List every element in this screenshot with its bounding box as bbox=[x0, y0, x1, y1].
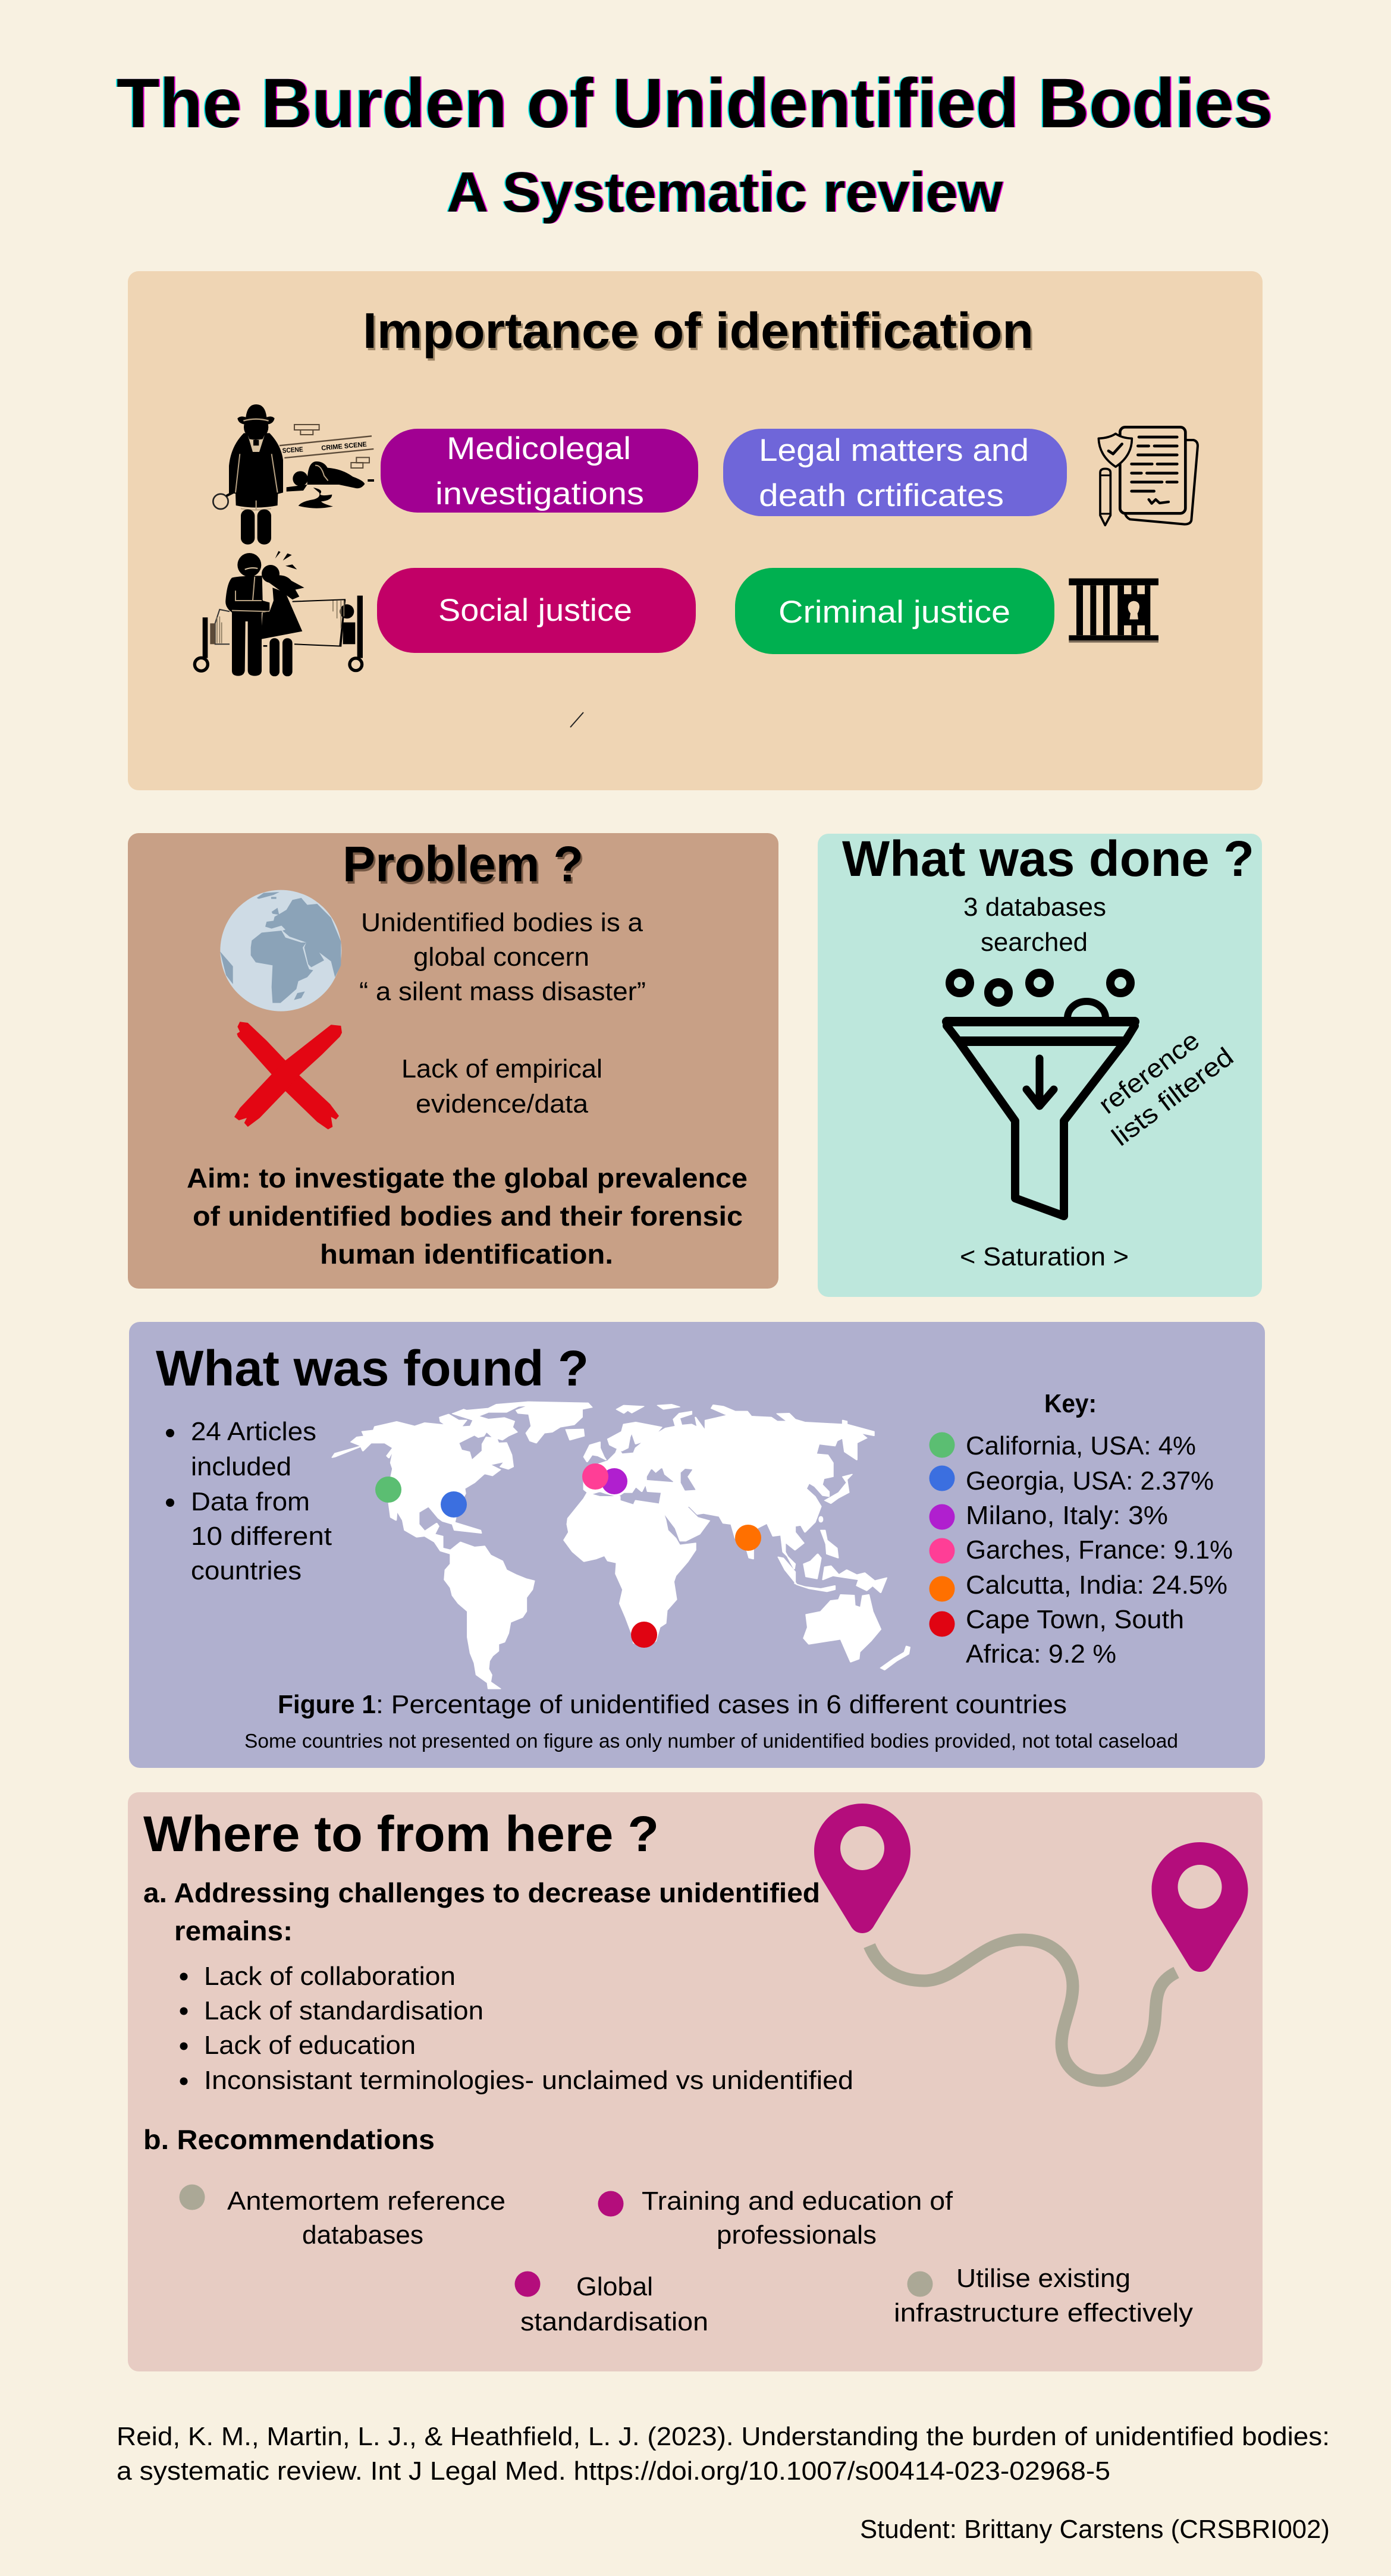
text: aim: Aim: to investigate the global prevalence bbox=[187, 1163, 748, 1193]
icon: detective at crime scene bbox=[213, 404, 374, 545]
section a heading: remains: bbox=[174, 1915, 293, 1946]
icon: globe bbox=[220, 890, 341, 1011]
pill: legal matters and death certificates: death crtificates bbox=[759, 478, 1004, 513]
icon: grieving couple at hospital bed bbox=[194, 551, 363, 676]
text: aim: of unidentified bodies and their forensic bbox=[193, 1201, 743, 1232]
pill: legal matters and death certificates: Legal matters and bbox=[759, 433, 1029, 468]
recommendation: global standardisation: standardisation bbox=[520, 2307, 708, 2336]
citation: Reid, K. M., Martin, L. J., & Heathfield, L. J. (2023). Understanding the burden of unidentified bodies: bbox=[117, 2422, 1330, 2451]
panel: where to from here bbox=[128, 1792, 1263, 2371]
bullet list: articles and data bbox=[166, 1417, 332, 1585]
bullet list: challenges: Lack of standardisation bbox=[204, 1996, 483, 2025]
panel: what was done bbox=[818, 831, 1262, 1297]
text: saturation: < Saturation > bbox=[960, 1242, 1129, 1271]
icon: documents, shield and pencil bbox=[1098, 427, 1198, 525]
recommendation: antemortem databases: Antemortem reference bbox=[227, 2187, 505, 2216]
pill: criminal justice bbox=[735, 568, 1054, 654]
text: reference lists filtered bbox=[1094, 1026, 1239, 1152]
text: lack of evidence bbox=[401, 1054, 602, 1119]
map legend: Milano, Italy: 3% bbox=[966, 1501, 1168, 1530]
figure note: Some countries not presented on figure as only number of unidentified bodies provided, not total caseload bbox=[244, 1730, 1178, 1752]
icon: jail bars bbox=[1069, 579, 1158, 643]
pill: legal matters and death certificates bbox=[723, 429, 1067, 516]
icon: map pin start bbox=[814, 1804, 910, 1933]
text: lack of evidence: evidence/data bbox=[416, 1089, 589, 1119]
map legend: Georgia, USA: 2.37% bbox=[966, 1466, 1214, 1496]
recommendation: antemortem databases bbox=[180, 2185, 505, 2250]
text: lack of evidence: Lack of empirical bbox=[401, 1054, 602, 1083]
recommendation: training and education bbox=[598, 2187, 953, 2250]
bullet list: articles and data: 24 Articles bbox=[191, 1417, 316, 1446]
text: global concern: global concern bbox=[413, 943, 589, 972]
pill: social justice bbox=[377, 568, 696, 653]
pill: medicolegal investigations: investigations bbox=[435, 476, 644, 511]
heading: importance of identification: Importance of identification bbox=[363, 303, 1034, 359]
heading: what was done: What was done ? bbox=[842, 831, 1254, 887]
citation bbox=[117, 2422, 1330, 2486]
recommendation: utilise infrastructure: infrastructure effectively bbox=[894, 2298, 1193, 2327]
icon: red cross bbox=[234, 1022, 342, 1129]
section b heading: b. Recommendations bbox=[143, 2124, 435, 2155]
heading: what was found: What was found ? bbox=[156, 1340, 589, 1396]
map legend bbox=[929, 1389, 1233, 1669]
bullet list: articles and data: countries bbox=[191, 1556, 302, 1585]
figure caption: Figure 1 bbox=[278, 1690, 376, 1719]
map legend: Key: bbox=[1044, 1389, 1097, 1418]
title: The Burden of Unidentified Bodies bbox=[117, 64, 1273, 143]
bullet list: articles and data: Data from bbox=[191, 1487, 310, 1516]
map marker: Cape Town bbox=[631, 1622, 657, 1648]
recommendation: utilise infrastructure bbox=[894, 2264, 1193, 2327]
pill: social justice: Social justice bbox=[438, 593, 632, 628]
text: databases searched: 3 databases bbox=[963, 893, 1106, 922]
icon: map pin end bbox=[1151, 1842, 1248, 1972]
heading: problem: Problem ? bbox=[343, 836, 583, 892]
pill: criminal justice: Criminal justice bbox=[778, 595, 1010, 630]
icon: funnel bbox=[947, 973, 1135, 1216]
panel: importance of identification bbox=[128, 271, 1263, 790]
text: global concern: Unidentified bodies is a bbox=[361, 908, 643, 937]
icon: detective at crime scene: CRIME SCENE bbox=[321, 441, 368, 452]
bullet list: challenges bbox=[180, 1962, 853, 2095]
section a heading bbox=[143, 1877, 820, 1946]
bullet list: challenges: Lack of collaboration bbox=[204, 1962, 456, 1991]
route illustration bbox=[814, 1804, 1248, 2081]
map legend: Calcutta, India: 24.5% bbox=[966, 1570, 1227, 1600]
text: global concern: “ a silent mass disaster” bbox=[359, 977, 646, 1006]
recommendation: global standardisation bbox=[515, 2272, 708, 2336]
text: databases searched: searched bbox=[981, 928, 1088, 957]
map marker: Georgia bbox=[441, 1491, 467, 1518]
text: aim: human identification. bbox=[320, 1239, 613, 1270]
map legend: Africa: 9.2 % bbox=[966, 1639, 1116, 1669]
map legend: California, USA: 4% bbox=[966, 1431, 1196, 1460]
title block bbox=[117, 64, 1273, 224]
recommendation: utilise infrastructure: Utilise existing bbox=[956, 2264, 1131, 2293]
panel: what was found bbox=[129, 1322, 1265, 1768]
map legend: Garches, France: 9.1% bbox=[966, 1535, 1233, 1565]
recommendation: global standardisation: Global bbox=[576, 2272, 653, 2301]
map marker: California bbox=[375, 1477, 401, 1503]
panel: problem bbox=[128, 833, 778, 1289]
bullet list: challenges: Inconsistant terminologies- unclaimed vs unidentified bbox=[204, 2066, 853, 2095]
student credit: Student: Brittany Carstens (CRSBRI002) bbox=[860, 2515, 1330, 2544]
text: global concern bbox=[359, 908, 646, 1006]
bullet list: challenges: Lack of education bbox=[204, 2031, 416, 2060]
text: reference lists filtered: lists filtered bbox=[1107, 1042, 1239, 1152]
stray mark bbox=[570, 712, 583, 727]
heading: where to from here: Where to from here ? bbox=[143, 1806, 659, 1862]
world map bbox=[332, 1402, 910, 1689]
section a heading: a. Addressing challenges to decrease unidentified bbox=[143, 1877, 820, 1908]
recommendation: training and education: professionals bbox=[717, 2220, 877, 2250]
text: databases searched bbox=[963, 893, 1106, 957]
pill: medicolegal investigations bbox=[381, 429, 698, 513]
citation: a systematic review. Int J Legal Med. https://doi.org/10.1007/s00414-023-02968-5 bbox=[117, 2456, 1110, 2486]
map marker: Calcutta bbox=[735, 1525, 761, 1551]
recommendation: antemortem databases: databases bbox=[302, 2220, 423, 2250]
icon: detective at crime scene: SCENE bbox=[282, 446, 303, 455]
map legend: Cape Town, South bbox=[966, 1605, 1184, 1634]
figure caption: : Percentage of unidentified cases in 6 different countries bbox=[376, 1690, 1067, 1719]
recommendation: training and education: Training and education of bbox=[642, 2187, 953, 2216]
bullet list: articles and data: included bbox=[191, 1452, 291, 1481]
subtitle: A Systematic review bbox=[447, 161, 1003, 224]
text: aim bbox=[187, 1163, 748, 1270]
pill: medicolegal investigations: Medicolegal bbox=[447, 431, 631, 466]
map marker: Milano bbox=[601, 1468, 627, 1494]
text: reference lists filtered: reference bbox=[1094, 1026, 1205, 1120]
map marker: Garches bbox=[582, 1463, 608, 1490]
bullet list: articles and data: 10 different bbox=[191, 1522, 332, 1551]
